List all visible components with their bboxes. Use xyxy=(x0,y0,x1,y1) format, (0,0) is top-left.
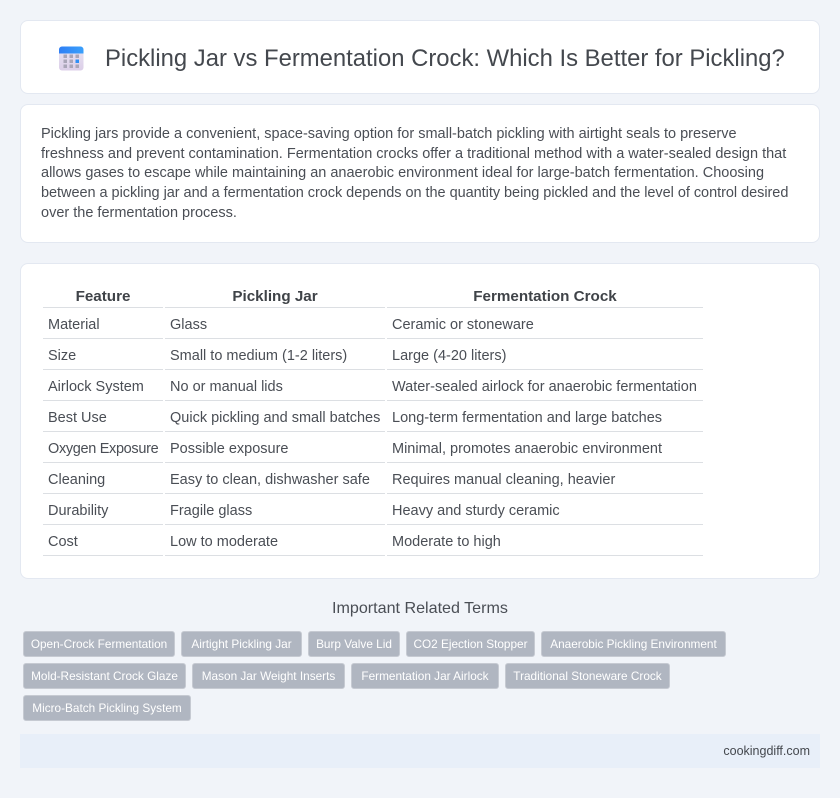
table row: material: Glass xyxy=(170,317,207,333)
table row: material: Material xyxy=(48,317,100,333)
table row: airlock system: Water-sealed airlock for anaerobic fermentation xyxy=(392,379,697,395)
table row: cost: Low to moderate xyxy=(170,534,278,550)
intro paragraph: between a pickling jar and a fermentation crock depends on the quantity being pickled and the level of control desired xyxy=(41,185,788,201)
panel: related term tags xyxy=(23,631,726,721)
tag: Fermentation Jar Airlock xyxy=(361,669,489,683)
table row: size: Small to medium (1-2 liters) xyxy=(170,348,347,364)
table row: durability xyxy=(48,503,560,519)
table row: airlock system: No or manual lids xyxy=(170,379,283,395)
tag xyxy=(23,663,186,689)
tag xyxy=(308,631,400,657)
intro paragraph: freshness and prevent contamination. Fermentation crocks offer a traditional method with a water-sealed design that xyxy=(41,146,786,162)
icon: calendar xyxy=(59,46,84,70)
table header: Feature xyxy=(76,288,130,305)
table row: durability: Heavy and sturdy ceramic xyxy=(392,503,560,519)
tag: Micro-Batch Pickling System xyxy=(32,701,182,715)
table row: durability: Fragile glass xyxy=(170,503,252,519)
tag xyxy=(181,631,302,657)
table row: oxygen exposure: Possible exposure xyxy=(170,441,288,457)
table row: cleaning: Cleaning xyxy=(48,472,105,488)
tag: CO2 Ejection Stopper xyxy=(413,637,528,651)
table row: size: Size xyxy=(48,348,76,364)
table row: best use xyxy=(48,410,662,426)
tag xyxy=(505,663,670,689)
table row: oxygen exposure: Oxygen Exposure xyxy=(48,441,158,457)
panel: comparison table xyxy=(20,263,820,579)
tag: Burp Valve Lid xyxy=(316,637,392,651)
tag: Anaerobic Pickling Environment xyxy=(550,637,717,651)
panel: title header xyxy=(20,20,820,94)
tag: Open-Crock Fermentation xyxy=(31,637,167,651)
table row: cost xyxy=(48,534,501,550)
footer bar xyxy=(20,734,820,768)
table row: cost: Moderate to high xyxy=(392,534,501,550)
intro paragraph: over the fermentation process. xyxy=(41,205,237,221)
table row: best use: Best Use xyxy=(48,410,107,426)
tag xyxy=(351,663,499,689)
table header: Pickling Jar xyxy=(232,288,318,305)
table header: Fermentation Crock xyxy=(473,288,617,305)
table row: airlock system: Airlock System xyxy=(48,379,144,395)
tag: Traditional Stoneware Crock xyxy=(513,669,662,683)
table row: size xyxy=(48,348,506,364)
intro paragraph: allows gases to escape while maintaining an anaerobic environment ideal for large-batch fermentation. Choosing xyxy=(41,165,764,181)
table header xyxy=(76,288,617,305)
heading: important related terms: Important Related Terms xyxy=(332,599,508,617)
table row: size: Large (4-20 liters) xyxy=(392,348,506,364)
title: Pickling Jar vs Fermentation Crock: Which Is Better for Pickling? xyxy=(105,45,785,72)
tag: Mold-Resistant Crock Glaze xyxy=(31,669,178,683)
table row: material: Ceramic or stoneware xyxy=(392,317,534,333)
intro paragraph: Pickling jars provide a convenient, space-saving option for small-batch pickling with airtight seals to preserve xyxy=(41,126,737,142)
footer source text: cookingdiff.com xyxy=(723,744,810,758)
table row: oxygen exposure xyxy=(48,441,662,457)
tag xyxy=(406,631,535,657)
table row: best use: Quick pickling and small batches xyxy=(170,410,380,426)
table row: best use: Long-term fermentation and large batches xyxy=(392,410,662,426)
table row: cleaning: Easy to clean, dishwasher safe xyxy=(170,472,370,488)
tag xyxy=(23,695,191,721)
tag xyxy=(541,631,726,657)
table row: cleaning xyxy=(48,472,616,488)
table row: airlock system xyxy=(48,379,697,395)
tag: Airtight Pickling Jar xyxy=(191,637,292,651)
tag xyxy=(23,631,175,657)
tag: Mason Jar Weight Inserts xyxy=(202,669,335,683)
intro paragraph xyxy=(41,126,788,221)
panel: introduction text xyxy=(20,104,820,243)
table row: oxygen exposure: Minimal, promotes anaerobic environment xyxy=(392,441,662,457)
tag xyxy=(192,663,345,689)
table row: cleaning: Requires manual cleaning, heavier xyxy=(392,472,615,488)
table row: material xyxy=(48,317,534,333)
table row: durability: Durability xyxy=(48,503,108,519)
table row: cost: Cost xyxy=(48,534,78,550)
